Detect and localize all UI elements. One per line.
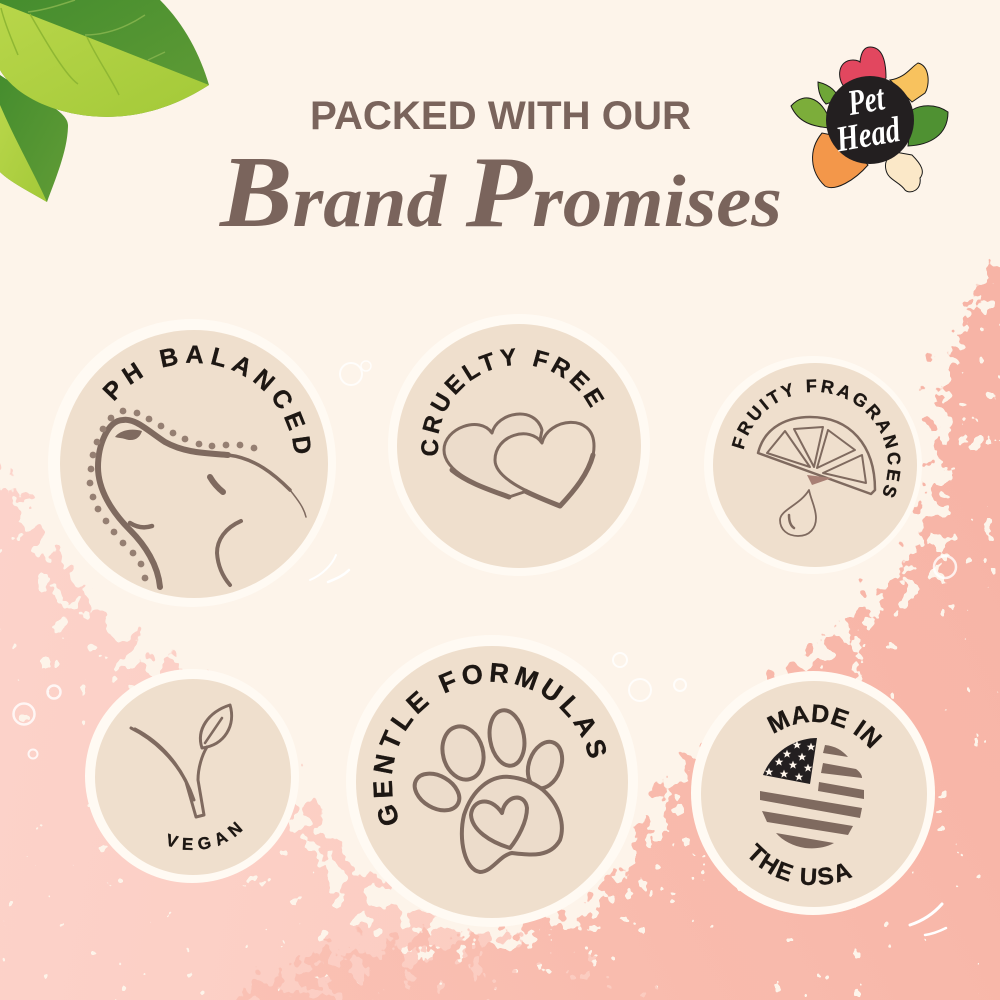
- badge ring: [346, 635, 638, 927]
- badge ring: [704, 356, 922, 574]
- icon: dog profile: [87, 408, 306, 587]
- badge disc: [397, 324, 641, 568]
- curved label: GENTLE FORMULAS: [373, 662, 606, 826]
- curved label bottom: THE USA: [749, 842, 853, 886]
- heading: packed with our: PACKED WITH OUR: [310, 94, 691, 138]
- logo: Pet Head: [791, 47, 948, 192]
- fruit leaves: [791, 82, 948, 146]
- curved label: VEGAN: [168, 821, 243, 850]
- flag stars: [765, 741, 815, 781]
- badge: fruity fragrances: [704, 356, 922, 574]
- curved label: PH BALANCED: [102, 346, 311, 454]
- icon: leaves top left: [0, 0, 209, 202]
- icon: sprout: [131, 705, 232, 817]
- badge: pH balanced: [48, 319, 336, 607]
- swoosh marks: [310, 555, 349, 582]
- dotted line: [87, 408, 257, 581]
- badge disc: [701, 681, 927, 907]
- badge: gentle formulas: [346, 635, 638, 927]
- logo wordmark pet: Pet: [844, 77, 888, 123]
- badge ring: [388, 314, 650, 576]
- icon: citrus slice and drop: [758, 417, 875, 536]
- fruit: peach: [890, 63, 928, 102]
- badge: vegan: [85, 669, 299, 883]
- lower leaf: [0, 75, 68, 202]
- logo wordmark head: Head: [832, 109, 904, 160]
- icon: paw with heart: [408, 707, 568, 872]
- curved label: FRUITY FRAGRANCES: [732, 379, 900, 498]
- badge disc: [713, 363, 917, 567]
- badge ring: [691, 671, 935, 915]
- swoosh marks bottom right: [910, 904, 946, 935]
- curved label: CRUELTY FREE: [421, 348, 604, 456]
- icon: two hearts: [444, 414, 594, 506]
- fruit: apple: [813, 133, 868, 188]
- light pink splatter wash: [0, 464, 658, 1000]
- fruit: heart cherry: [840, 47, 886, 95]
- heading: brand promises script: Brand Promises: [219, 136, 782, 249]
- badge ring: [48, 319, 336, 607]
- upper leaf: [0, 0, 209, 117]
- badge: made in the USA: [691, 671, 935, 915]
- fruit: bone: [885, 152, 922, 192]
- logo badge: [826, 76, 914, 164]
- badge ring: [85, 669, 299, 883]
- icon: flag globe: [760, 738, 864, 848]
- curved label top: MADE IN: [766, 704, 882, 749]
- badge disc: [95, 679, 291, 875]
- badge disc: [60, 330, 328, 598]
- darker pink splatter wash: [236, 258, 1000, 1000]
- soap bubbles: [14, 361, 956, 758]
- badge disc: [356, 646, 628, 918]
- badge: cruelty free: [388, 314, 650, 576]
